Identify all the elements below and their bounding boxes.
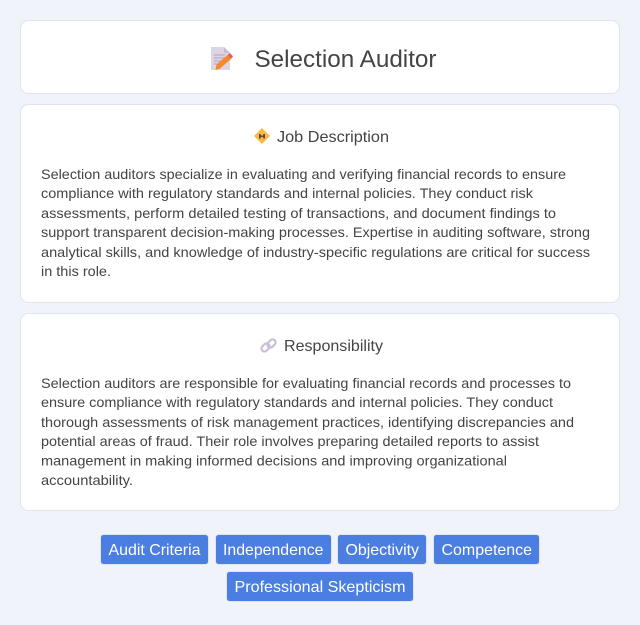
text block: job description: in this role.	[41, 263, 111, 279]
text block: job description	[41, 166, 590, 279]
text block: responsibility	[41, 375, 574, 488]
text block: job description: Selection auditors specialize in evaluating and verifying financial records to ensure	[41, 166, 566, 182]
tag: independence	[216, 534, 332, 564]
tag: professional skepticism	[226, 572, 414, 602]
icon: chain link	[260, 338, 277, 353]
heading: job description: Job Description	[277, 129, 389, 146]
tag: competence: Competence	[442, 542, 532, 559]
tag: independence: Independence	[223, 542, 324, 559]
icon: document with pencil	[211, 47, 233, 70]
text block: responsibility: thorough assessments of risk management practices, identifying discrepancies and	[41, 414, 574, 430]
text block: job description: compliance with regulatory standards and internal policies. They conduct risk	[41, 185, 534, 201]
text block: responsibility: accountability.	[41, 472, 133, 488]
title: Selection Auditor	[254, 46, 436, 73]
tag: objectivity: Objectivity	[346, 542, 419, 559]
panel: responsibility	[20, 314, 620, 510]
text block: job description: support transparent decision-making processes. Expertise in auditing software, strong	[41, 224, 590, 240]
text block: job description: analytical skills, and knowledge of industry-specific regulations are critical for success	[41, 244, 590, 260]
text block: responsibility: Selection auditors are responsible for evaluating financial records and processes to	[41, 375, 571, 391]
tag list	[100, 534, 540, 602]
icon: diamond road sign	[255, 129, 269, 143]
text block: job description: assessments, perform detailed testing of transactions, and document findings to	[41, 205, 556, 221]
tag: audit criteria	[100, 534, 208, 564]
tag: professional skepticism: Professional Skepticism	[234, 579, 406, 596]
tag: objectivity	[338, 534, 426, 564]
tag: audit criteria: Audit Criteria	[108, 542, 201, 559]
heading: responsibility: Responsibility	[284, 338, 383, 355]
tag: competence	[434, 534, 540, 564]
text block: responsibility: ensure compliance with regulatory standards and internal policies. They conduct	[41, 394, 553, 410]
text block: responsibility: potential areas of fraud. Their role involves preparing detailed reports to assist	[41, 433, 539, 449]
panel: job description	[20, 104, 620, 302]
text block: responsibility: management in making informed decisions and improving organizational	[41, 452, 507, 468]
panel: title header	[20, 20, 620, 94]
